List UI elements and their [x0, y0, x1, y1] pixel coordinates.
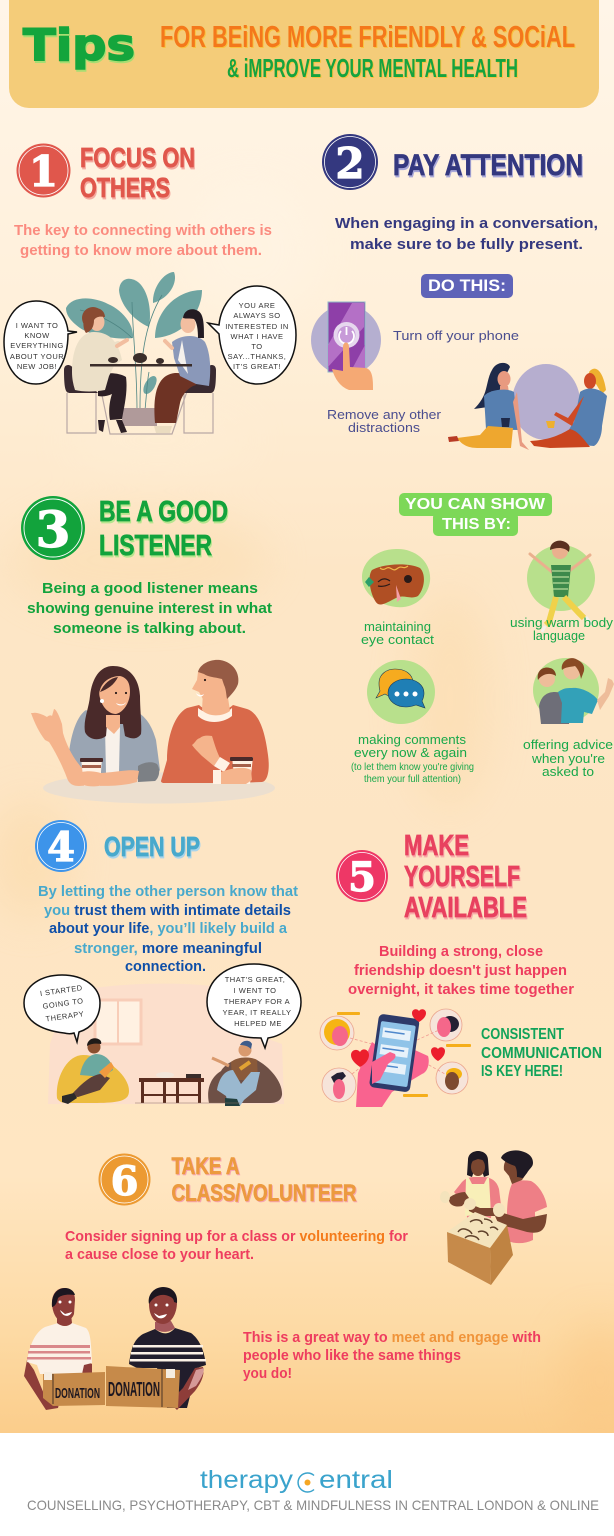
text: consistent communication is key here: COMMUNICATION [481, 1045, 602, 1062]
intro text 5: Building a strong, close [379, 943, 543, 960]
intro text 6: Consider signing up for a class or volunteering for [65, 1228, 408, 1245]
intro text 3 [27, 580, 272, 637]
heading 3: LISTENER [99, 530, 212, 562]
intro text 4 [38, 883, 298, 975]
badge 5 [336, 850, 388, 902]
speech bubble left: I WANT TO [16, 321, 58, 330]
heading 6: TAKE A [172, 1153, 240, 1180]
text: remove distractions [327, 407, 442, 435]
intro text 5: friendship doesn't just happen [354, 962, 567, 979]
speech bubble right: ALWAYS SO [233, 311, 281, 320]
box label left: DONATION [55, 1385, 100, 1402]
intro text 4: By letting the other person know that [38, 883, 298, 900]
speech bubble: I started going to therapy [24, 975, 100, 1042]
heading 5: MAKE [404, 830, 469, 862]
footer logo: therapy central [200, 1466, 393, 1494]
heading 6 [172, 1153, 356, 1207]
intro text 4: you trust them with intimate details [44, 902, 291, 919]
text: using warm body language [510, 615, 614, 643]
text: offering advice [523, 737, 613, 779]
section 4: open up [24, 820, 301, 1106]
title word: Tips: Tips [23, 20, 135, 71]
speech bubble right [208, 286, 296, 384]
speech bubble left: NEW JOB! [17, 362, 57, 371]
text: turn off your phone: Turn off your phone [393, 328, 519, 343]
speech bubble right: IT'S GREAT! [233, 362, 281, 371]
speech bubble: that's great: THAT'S GREAT, [225, 975, 285, 984]
heading 1: FOCUS ON [80, 142, 195, 173]
heading 1 [80, 142, 195, 203]
speech bubble: I started going to therapy: GOING TO [42, 996, 84, 1011]
intro text 1 [14, 222, 272, 259]
section 3: be a good listener [21, 493, 614, 804]
heading 6: CLASS/VOLUNTEER [172, 1180, 356, 1207]
badge 3 [21, 496, 85, 560]
intro text 3: showing genuine interest in what [27, 600, 272, 617]
section 6: take a class / volunteer [24, 1150, 547, 1410]
intro text 4: stronger, more meaningful [74, 940, 262, 957]
speech bubble: that's great: THERAPY FOR A [224, 997, 290, 1006]
intro text 1: getting to know more about them. [20, 242, 262, 259]
text: making comments: every now & again [354, 745, 467, 760]
intro text 5 [348, 943, 574, 998]
heading 5: AVAILABLE [404, 892, 527, 924]
text: making comments: them your full attention) [364, 773, 461, 785]
badge 1: 1 [29, 147, 58, 196]
speech bubble left [4, 301, 77, 384]
badge 4 [35, 820, 87, 872]
badge 6 [98, 1154, 150, 1206]
speech bubble: I started going to therapy: I STARTED [39, 983, 83, 998]
heading 3 [99, 496, 228, 562]
speech bubble right: INTERESTED IN [225, 322, 289, 331]
speech bubble right: SAY...THANKS, [228, 352, 286, 361]
text: offering advice: asked to [542, 764, 594, 779]
section 2: pay attention [311, 134, 607, 450]
badge 2 [322, 134, 378, 190]
heading 5 [404, 830, 527, 924]
text: using warm body language: language [533, 628, 585, 643]
illustration: hand holding phone with friends and hearts [320, 1009, 471, 1107]
illustration: two men holding donation boxes [24, 1287, 206, 1410]
closing text 6: people who like the same things [243, 1347, 461, 1364]
badge 6: 6 [111, 1158, 138, 1205]
intro text 2: make sure to be fully present. [350, 236, 583, 253]
icon: finger on phone power button [311, 302, 381, 390]
text: remove distractions: distractions [348, 420, 421, 435]
section 1: focus on others [4, 142, 296, 434]
speech bubble left: KNOW [24, 331, 50, 340]
closing text 6: This is a great way to meet and engage with [243, 1329, 541, 1346]
icon: speech bubbles [367, 660, 435, 724]
heading 1: OTHERS [80, 172, 170, 203]
closing text 6: you do! [243, 1365, 292, 1382]
badge 3: 3 [36, 500, 70, 559]
text: maintaining eye contact: maintaining [364, 619, 431, 634]
intro text 5: overnight, it takes time together [348, 981, 574, 998]
text: using warm body language: using warm body [510, 615, 614, 630]
icon: eye contact [362, 549, 430, 607]
badge 2: 2 [335, 139, 365, 188]
intro text 6: a cause close to your heart. [65, 1246, 254, 1263]
text: offering advice: when you're [531, 751, 605, 766]
footer logo: therapy central: entral [319, 1466, 393, 1494]
speech bubble: that's great: I WENT TO [234, 986, 276, 995]
text: offering advice: offering advice [523, 737, 613, 752]
text: remove distractions: Remove any other [327, 407, 442, 422]
illustration: two men holding donation boxes: DONATION [108, 1379, 160, 1401]
illustration: two women sitting [448, 363, 607, 450]
section 5: make yourself available [320, 830, 602, 1107]
badge 5: 5 [348, 854, 376, 901]
illustration: woman and man listening [31, 660, 275, 804]
speech bubble: that's great [207, 964, 301, 1048]
closing text 6 [243, 1329, 541, 1382]
text: maintaining eye contact [361, 619, 434, 647]
illustration: two women at a cafe table [64, 272, 216, 434]
speech bubble right: TO [251, 342, 263, 351]
footer band [0, 1433, 614, 1536]
illustration: volunteers packing a box [440, 1150, 547, 1285]
label: you can show this by: YOU CAN SHOW [405, 496, 546, 513]
illustration: therapy conversation in a lounge [48, 984, 284, 1106]
speech bubble: that's great: HELPED ME [234, 1019, 282, 1028]
speech bubble left: ABOUT YOUR [10, 352, 64, 361]
intro text 6 [65, 1228, 408, 1263]
label: you can show this by [399, 493, 552, 536]
text: consistent communication is key here [481, 1026, 602, 1080]
badge 4: 4 [47, 824, 75, 871]
speech bubble: I started going to therapy: THERAPY [45, 1009, 85, 1024]
heading 3: BE A GOOD [99, 496, 228, 528]
speech bubble right: WHAT I HAVE [230, 332, 284, 341]
speech bubble right: YOU ARE [239, 301, 275, 310]
speech bubble left: EVERYTHING [10, 341, 64, 350]
text: making comments [351, 732, 474, 785]
label: do this: DO THIS: [428, 276, 506, 295]
text: consistent communication is key here: IS KEY HERE! [481, 1063, 563, 1080]
intro text 1: The key to connecting with others is [14, 222, 272, 239]
header panel [9, 0, 599, 108]
icon: two friends talking [533, 658, 614, 724]
label: you can show this by: THIS BY: [442, 516, 511, 533]
badge 1 [16, 144, 70, 198]
text: maintaining eye contact: eye contact [361, 632, 434, 647]
speech bubble: that's great: YEAR, IT REALLY [223, 1008, 291, 1017]
heading 4: OPEN UP [104, 831, 200, 862]
intro text 3: Being a good listener means [42, 580, 258, 597]
icon: warm body language [527, 541, 595, 632]
footer tagline: COUNSELLING, PSYCHOTHERAPY, CBT & MINDFULNESS IN CENTRAL LONDON & ONLINE [27, 1497, 599, 1513]
intro text 2: When engaging in a conversation, [335, 215, 598, 232]
intro text 4: connection. [125, 958, 206, 975]
text: consistent communication is key here: CONSISTENT [481, 1026, 564, 1043]
intro text 3: someone is talking about. [53, 620, 246, 637]
intro text 2 [335, 215, 598, 253]
footer logo: therapy central: therapy [200, 1466, 294, 1494]
intro text 4: about your life, you’ll likely build a [49, 920, 288, 937]
label: do this [421, 274, 513, 298]
text: making comments: making comments [358, 732, 467, 747]
text: making comments: (to let them know you're giving [351, 761, 474, 773]
heading 5: YOURSELF [404, 861, 520, 893]
